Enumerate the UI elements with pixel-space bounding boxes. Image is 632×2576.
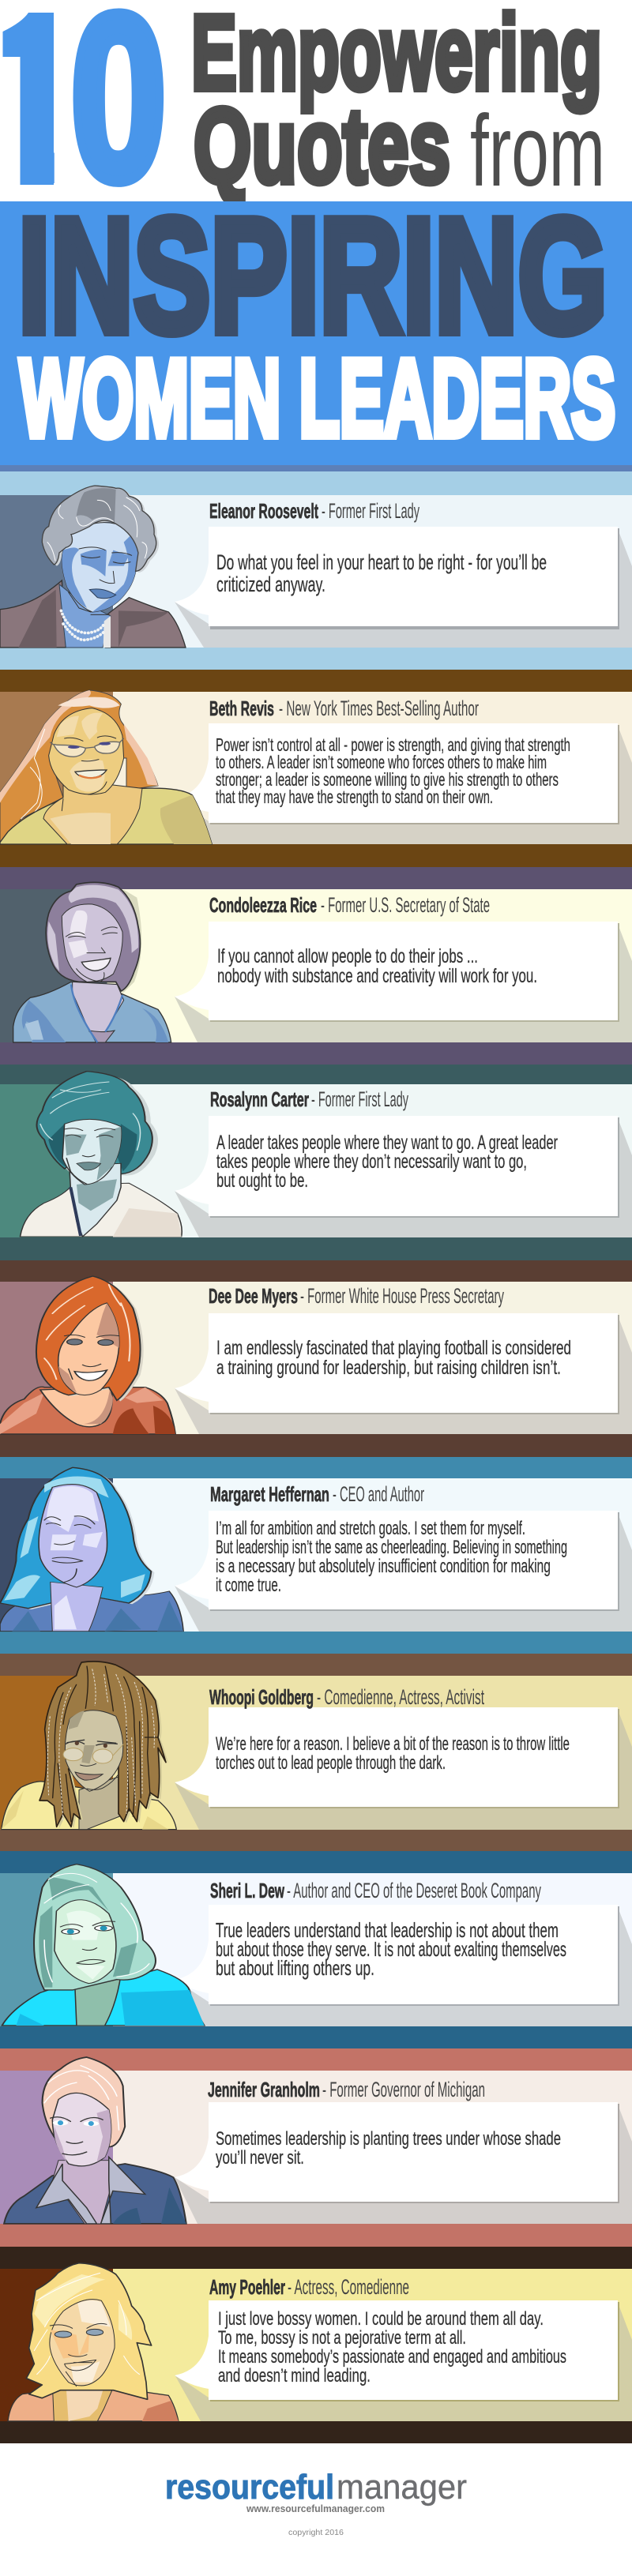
quote box bbox=[175, 2300, 619, 2401]
footer logo: resourceful bbox=[165, 2468, 334, 2507]
role: - Former First Lady bbox=[311, 1087, 408, 1111]
panel: Eleanor Roosevelt bbox=[0, 471, 632, 670]
footer logo: www.resourcefulmanager.com bbox=[246, 2503, 385, 2514]
quote text bbox=[216, 550, 547, 596]
role: - CEO and Author bbox=[333, 1482, 424, 1506]
role: - Former U.S. Secretary of State bbox=[321, 893, 490, 917]
quote text bbox=[216, 1337, 571, 1379]
name: Margaret Heffernan: Margaret Heffernan bbox=[210, 1482, 329, 1506]
portrait: Amy Poehler bbox=[8, 2263, 179, 2421]
title bbox=[0, 0, 632, 471]
quote text: torches out to lead people through the dark. bbox=[216, 1752, 446, 1774]
quote text: and doesn’t mind leading. bbox=[218, 2365, 371, 2386]
role: - Comedienne, Actress, Activist bbox=[317, 1685, 484, 1709]
name: Jennifer Granholm: Jennifer Granholm bbox=[208, 2078, 320, 2101]
quote text bbox=[216, 1918, 566, 1980]
role: - New York Times Best-Selling Author bbox=[279, 697, 479, 720]
quote text: To me, bossy is not a pejorative term at all. bbox=[218, 2327, 466, 2349]
panel: Sheri L. Dew bbox=[0, 1851, 632, 2048]
footer logo: copyright 2016 bbox=[288, 2528, 344, 2537]
quote text: you’ll never sit. bbox=[216, 2147, 304, 2169]
portrait: Dee Dee Myers bbox=[0, 1276, 175, 1434]
name: Condoleezza Rice: Condoleezza Rice bbox=[209, 893, 317, 917]
footer logo: manager bbox=[337, 2468, 467, 2507]
portrait: Whoopi Goldberg bbox=[2, 1662, 176, 1830]
role: - Actress, Comedienne bbox=[288, 2275, 409, 2299]
quote text: but ought to be. bbox=[216, 1170, 308, 1192]
name: Whoopi Goldberg: Whoopi Goldberg bbox=[209, 1685, 314, 1709]
quote box bbox=[175, 1905, 619, 2006]
quote text bbox=[216, 734, 570, 807]
quote box bbox=[175, 1313, 619, 1414]
name: Dee Dee Myers: Dee Dee Myers bbox=[209, 1284, 298, 1308]
panel: Whoopi Goldberg bbox=[0, 1654, 632, 1851]
name: Amy Poehler: Amy Poehler bbox=[209, 2275, 285, 2299]
quote box bbox=[175, 527, 619, 629]
quote box bbox=[175, 922, 619, 1022]
quote text bbox=[216, 1733, 570, 1774]
quote text: it come true. bbox=[216, 1575, 281, 1596]
portrait: Eleanor Roosevelt bbox=[0, 486, 186, 648]
panel: Margaret Heffernan bbox=[0, 1457, 632, 1654]
quote text bbox=[217, 945, 537, 987]
name: Rosalynn Carter: Rosalynn Carter bbox=[210, 1087, 309, 1111]
quote text bbox=[218, 2308, 566, 2386]
portrait: Beth Revis bbox=[0, 690, 212, 844]
quote text bbox=[216, 1132, 558, 1192]
panel: Amy Poehler bbox=[0, 2247, 632, 2443]
panel: Jennifer Granholm bbox=[0, 2048, 632, 2247]
portrait: Sheri L. Dew bbox=[2, 1864, 205, 2026]
role: - Former Governor of Michigan bbox=[322, 2078, 485, 2101]
name: Eleanor Roosevelt: Eleanor Roosevelt bbox=[209, 499, 318, 523]
portrait: Rosalynn Carter bbox=[21, 1072, 182, 1237]
quote box bbox=[175, 1116, 619, 1218]
quote box bbox=[175, 723, 619, 824]
quote box bbox=[175, 1511, 619, 1611]
quote text: but about lifting others up. bbox=[216, 1956, 374, 1980]
role: - Former First Lady bbox=[322, 499, 419, 523]
quote text: criticized anyway. bbox=[216, 573, 325, 596]
quote text: If you cannot allow people to do their jobs ... bbox=[217, 945, 478, 967]
banner underline bbox=[0, 465, 632, 471]
quote text bbox=[216, 2128, 561, 2169]
portrait: Jennifer Granholm bbox=[4, 2057, 186, 2224]
heading: Quotes: Quotes bbox=[194, 86, 450, 205]
name: Sheri L. Dew: Sheri L. Dew bbox=[210, 1879, 284, 1902]
panel: Beth Revis bbox=[0, 670, 632, 867]
portrait: Condoleezza Rice bbox=[13, 882, 171, 1042]
footer logo bbox=[165, 2468, 467, 2537]
panel: Dee Dee Myers bbox=[0, 1260, 632, 1457]
panel: Rosalynn Carter bbox=[0, 1065, 632, 1260]
portrait: Margaret Heffernan bbox=[0, 1467, 183, 1632]
quote text bbox=[216, 1518, 567, 1596]
quote box bbox=[175, 2102, 619, 2203]
quote box bbox=[175, 1707, 619, 1808]
banner bbox=[0, 201, 632, 465]
name: Beth Revis: Beth Revis bbox=[209, 697, 274, 720]
panel: Condoleezza Rice bbox=[0, 867, 632, 1065]
